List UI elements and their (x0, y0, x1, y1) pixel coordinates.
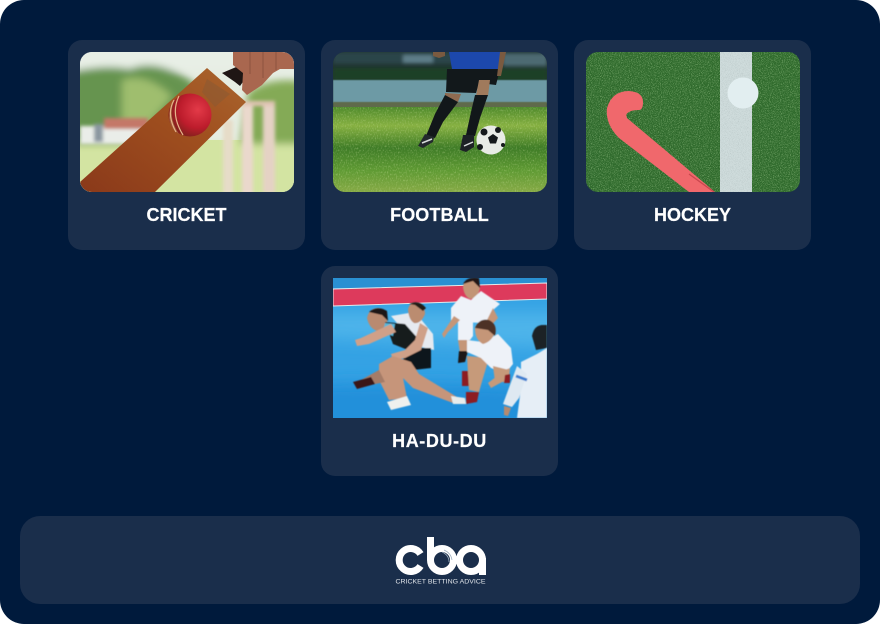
defender 1 (391, 302, 434, 350)
image: ha-du-du players (333, 278, 547, 418)
hockey stick (607, 91, 715, 192)
panel: football (321, 40, 558, 250)
logo letter c (399, 548, 420, 572)
logo: cricket betting advice (396, 537, 486, 586)
panel: cricket (68, 40, 305, 250)
defender 2 (442, 278, 500, 363)
image: hockey stick and ball (586, 52, 800, 192)
cricket ball (168, 94, 212, 136)
referee (503, 325, 547, 418)
label: ha-du-du: HA-DU-DU (392, 431, 487, 451)
hockey ball (728, 78, 758, 108)
panel: ha-du-du (321, 266, 558, 476)
logo tagline: CRICKET BETTING ADVICE (396, 578, 486, 586)
panel: hockey (574, 40, 811, 250)
raider (353, 308, 466, 410)
image: cricket bat and ball (80, 52, 294, 192)
football (476, 126, 506, 154)
logo letter b (430, 537, 454, 572)
logo letter a (460, 548, 482, 575)
image: football player and ball (333, 52, 547, 192)
defender 3 (462, 320, 513, 404)
footer bar (20, 516, 860, 604)
label: hockey: HOCKEY (654, 205, 731, 225)
label: football: FOOTBALL (390, 205, 489, 225)
label: cricket: CRICKET (146, 205, 226, 225)
